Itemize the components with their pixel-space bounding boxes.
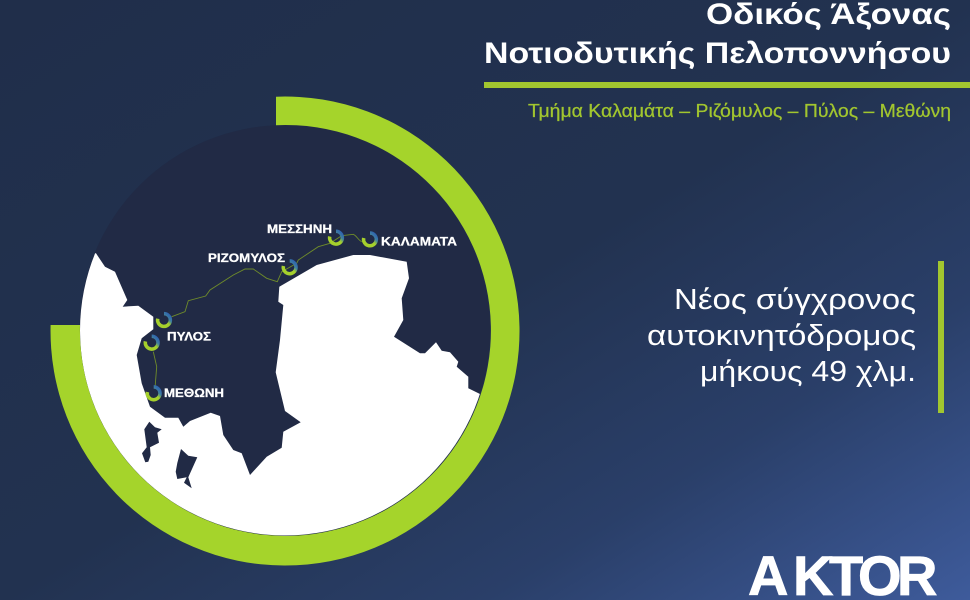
place labels: ΠΥΛΟΣ [167, 330, 211, 344]
title underline bar [484, 82, 970, 88]
island: Sapientza [142, 422, 162, 462]
vertical accent bar [938, 261, 944, 413]
description text: Νέος σύγχρονος [674, 284, 916, 316]
green ring [51, 97, 520, 566]
place labels: ΚΑΛΑΜΑΤΑ [381, 234, 457, 248]
title [484, 0, 951, 70]
map circle [50, 96, 520, 566]
description text: αυτοκινητόδρομος [647, 320, 916, 352]
marker: Pylos lower [145, 336, 158, 349]
white sea areas [80, 253, 480, 536]
island: Schiza [176, 449, 197, 488]
place labels: ΡΙΖΟΜΥΛΟΣ [208, 251, 285, 265]
place labels [164, 222, 457, 400]
marker: Pylos upper [158, 314, 170, 326]
subtitle: Τμήμα Καλαμάτα – Ριζόμυλος – Πύλος – Μεθώνη [528, 101, 951, 121]
marker: Methoni [147, 387, 160, 400]
place labels: ΜΕΣΣΗΝΗ [267, 222, 332, 236]
description text [647, 284, 916, 388]
description text: μήκους 49 χλμ. [700, 356, 916, 388]
route line [153, 234, 362, 388]
marker: Kalamata [364, 233, 376, 246]
marker: Messini [330, 231, 342, 244]
title: Νοτιοδυτικής Πελοποννήσου [484, 37, 951, 70]
dark land disc [80, 125, 490, 536]
marker: Rizomylos [283, 261, 296, 274]
place labels: ΜΕΘΩΝΗ [164, 386, 224, 400]
